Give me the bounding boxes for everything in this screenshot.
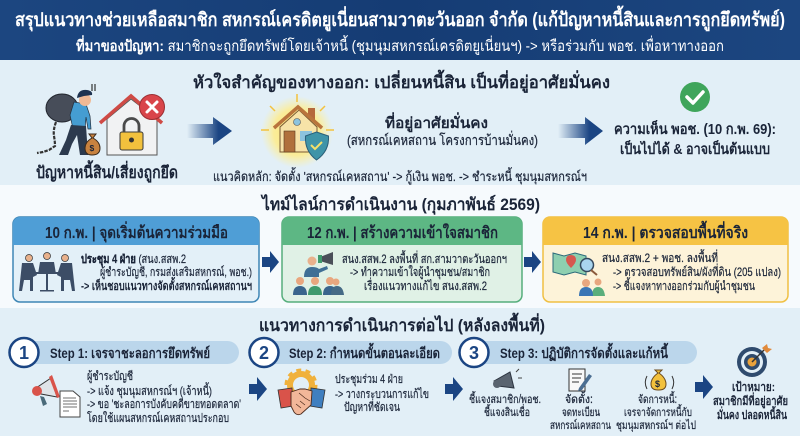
sub-step: register: จดทะเบียน <box>562 406 600 419</box>
card: 14 Feb: 14 ก.พ. | ตรวจสอบพื้นที่จริง <box>583 220 748 242</box>
step 2 text: -> วางกระบวนการแก้ไข <box>335 387 429 401</box>
sub-step: manage debt <box>616 370 696 432</box>
step 3 header: 3 <box>469 343 479 363</box>
step 2 header: 2 <box>259 343 269 363</box>
outreach text: สนง.สสพ.2 ลงพื้นที่ สก.สามวาตะวันออกฯ <box>342 250 507 266</box>
sub-step: explain: ชี้แจงสินเชื่อ <box>484 404 530 419</box>
panel: key solution <box>0 60 800 185</box>
step 2 header <box>250 338 452 367</box>
icon: meeting <box>19 252 75 292</box>
card: 14 Feb <box>543 217 788 302</box>
step 1 text: ผู้ชำระบัญชี <box>87 369 133 384</box>
inspection text <box>602 249 781 294</box>
icon: target <box>737 344 772 377</box>
step 1 header <box>10 338 239 367</box>
arrow <box>249 377 267 401</box>
sub-step: manage debt: เจรจาจัดการหนี้กับ <box>624 404 692 419</box>
sub-step: manage debt: $ <box>655 379 660 389</box>
timeline heading: ไทม์ไลน์การดำเนินงาน (กุมภาพันธ์ 2569) <box>260 194 540 215</box>
icon: green check <box>680 82 710 112</box>
problem label: ปัญหาหนี้สิน/เสี่ยงถูกยึด <box>36 160 178 184</box>
icon: secure home with shield <box>261 94 334 168</box>
sub-step: explain <box>469 369 541 419</box>
step 1 header: Step 1: เจรจาชะลอการยึดทรัพย์ <box>50 345 210 361</box>
arrow <box>445 377 463 401</box>
inspection text: -> ชี้แจงหาทางออกร่วมกับผู้นำชุมชน <box>613 277 755 294</box>
step 2 text: ปัญหาที่ชัดเจน <box>344 398 400 414</box>
sub-step: manage debt: ชุมนุมสหกรณ์ฯ ต่อไป <box>616 418 696 432</box>
step 2 header: Step 2: กำหนดขั้นตอนละเอียด <box>289 342 440 361</box>
meeting text: ผู้ชำระบัญชี, กรมส่งเสริมสหกรณ์, พอช.) <box>100 265 252 280</box>
arrow <box>524 251 541 273</box>
step 1 text: โดยใช้แผนสหกรณ์เคหสถานประกอบ <box>87 411 229 425</box>
inspection text: สนง.สสพ.2 + พอช. ลงพื้นที่ <box>602 249 718 265</box>
card: 12 Feb: 12 ก.พ. | สร้างความเข้าใจสมาชิก <box>307 223 498 242</box>
CODI opinion <box>614 119 776 158</box>
secure housing text: ที่อยู่อาศัยมั่นคง <box>385 112 488 133</box>
card: 10 Feb <box>13 217 259 302</box>
card: 12 Feb <box>282 217 522 302</box>
icon: money bag <box>85 134 100 155</box>
sub-step: register: จัดตั้ง: <box>565 391 593 406</box>
sub-step: manage debt: จัดการหนี้: <box>638 391 677 406</box>
icon: map, magnifier and people <box>553 253 605 296</box>
CODI opinion: เป็นไปได้ & อาจเป็นต้นแบบ <box>620 139 770 158</box>
subtitle: ที่มาของปัญหา: สมาชิกจะถูกยึดทรัพย์โดยเจ้าหนี้ (ชุมนุมสหกรณ์เครดิตยูเนี่ยนฯ) -> หรือร่วมกับ พอช. เพื่อหาทางออก <box>76 35 724 56</box>
step 1 text: -> ขอ 'ชะลอการบังคับคดีขายทอดตลาด' <box>87 397 241 411</box>
outreach text: -> ทำความเข้าใจผู้นำชุมชน/สมาชิก <box>350 265 490 280</box>
card: 10 Feb: 10 ก.พ. | จุดเริ่มต้นความร่วมมือ <box>45 221 228 243</box>
step 2 text: ประชุมร่วม 4 ฝ่าย <box>335 372 403 387</box>
meeting text: ประชุม 4 ฝ่าย (สนง.สสพ.2 <box>81 252 186 267</box>
icon: speaker and audience <box>293 252 344 295</box>
section heading: แนวทางการดำเนินการต่อไป (หลังลงพื้นที่) <box>259 312 545 335</box>
sub-step: register <box>550 369 611 432</box>
goal text: เป้าหมาย: <box>732 380 775 394</box>
CODI opinion: ความเห็น พอช. (10 ก.พ. 69): <box>614 119 776 138</box>
section heading: หัวใจสำคัญของทางออก: เปลี่ยนหนี้สิน เป็นที่อยู่อาศัยมั่นคง <box>193 69 610 94</box>
step 3 header: Step 3: ปฏิบัติการจัดตั้งและแก้หนี้ <box>500 342 668 362</box>
outreach text: เรื่องแนวทางแก้ไข สนง.สสพ.2 <box>364 277 487 293</box>
step 1 text <box>87 369 241 425</box>
arrow <box>558 117 603 145</box>
arrow <box>695 375 713 399</box>
sub-step: register: สหกรณ์เคหสถาน <box>550 418 611 432</box>
arrow <box>262 251 279 273</box>
secure housing text <box>347 112 538 148</box>
step 2 text <box>335 372 429 414</box>
icon: debtor with sack and chain: $ <box>90 143 94 153</box>
meeting text <box>81 252 252 293</box>
meeting text: -> เห็นชอบแนวทางจัดตั้งสหกรณ์เคหสถานฯ <box>81 276 252 293</box>
goal text <box>713 380 788 422</box>
step 1 text: -> แจ้ง ชุมนุมสหกรณ์ฯ (เจ้าหนี้) <box>87 382 212 399</box>
icon: locked house with red cross <box>100 94 164 155</box>
step 1 header: 1 <box>19 343 29 363</box>
step 3 header <box>460 338 697 367</box>
panel: header <box>0 0 800 60</box>
outreach text <box>342 250 507 293</box>
core concept: แนวคิดหลัก: จัดตั้ง 'สหกรณ์เคหสถาน' -> กู้เงิน พอช. -> ชำระหนี้ ชุมนุมสหกรณ์ฯ <box>213 167 587 185</box>
icon: megaphone and document <box>32 375 80 417</box>
sub-step: explain: ชี้แจงสมาชิก/พอช. <box>469 391 541 406</box>
icon: debtor with sack and chain <box>37 84 100 155</box>
panel: next steps <box>0 308 800 436</box>
arrow <box>187 117 232 145</box>
secure housing text: (สหกรณ์เคหสถาน โครงการบ้านมั่นคง) <box>347 131 538 148</box>
icon: gear and handshake <box>278 370 325 415</box>
